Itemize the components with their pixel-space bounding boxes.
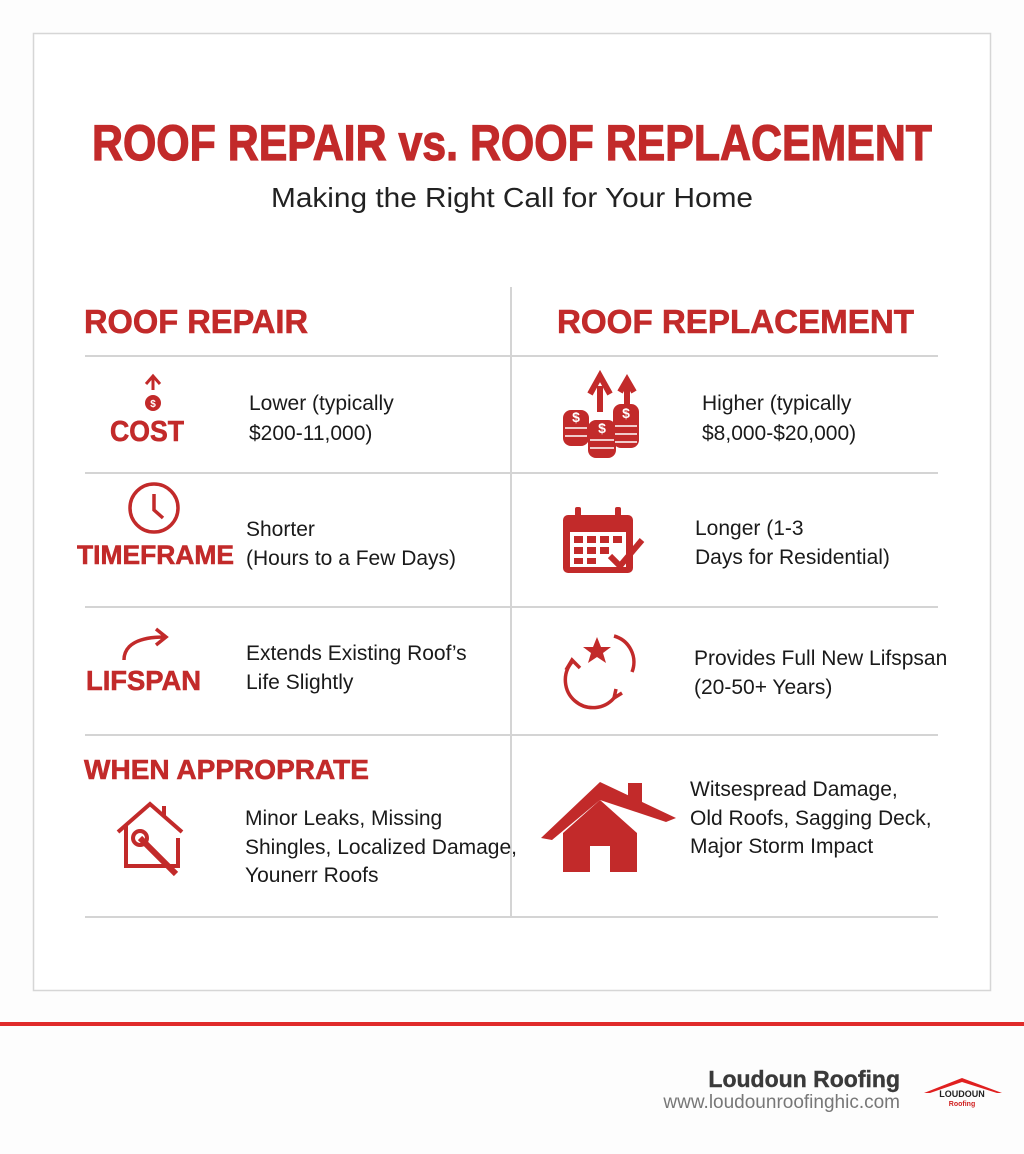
text: replacement timeframe: Days for Residential) [695, 546, 890, 569]
icon: stacked coins [563, 376, 639, 458]
text: replacement lifespan: (20-50+ Years) [694, 676, 832, 699]
text: repair cost: $200-11,000) [249, 422, 372, 445]
footer brand [662, 1066, 900, 1113]
text: repair timeframe: Shorter [246, 518, 315, 541]
footer brand: www.loudounroofinghic.com [662, 1092, 900, 1113]
label: timeframe: TIMEFRAME [77, 540, 234, 570]
label: lifspan: LIFSPAN [86, 665, 201, 696]
icon: house [541, 782, 676, 872]
text: replacement when: Major Storm Impact [690, 835, 873, 858]
icon: stacked coins: $ [572, 409, 580, 425]
text: repair cost: Lower (typically [249, 392, 394, 415]
text: repair timeframe: (Hours to a Few Days) [246, 547, 456, 570]
subtitle: Making the Right Call for Your Home [271, 182, 753, 213]
divider: red footer line [0, 1022, 1024, 1026]
text: replacement cost: Higher (typically [702, 392, 851, 415]
icon: logo: LOUDOUN [939, 1089, 985, 1099]
text: replacement when: Old Roofs, Sagging Deck, [690, 807, 932, 830]
icon: clock [130, 484, 178, 532]
text: replacement lifespan: Provides Full New Lifspsan [694, 647, 947, 670]
icon: house wrench [118, 804, 182, 874]
panel: main card [34, 34, 990, 990]
icon: logo: Roofing [949, 1101, 975, 1108]
heading: when appropriate: WHEN APPROPRATE [84, 754, 369, 785]
icon: calendar [563, 507, 642, 573]
text: repair when: Shingles, Localized Damage, [245, 836, 517, 859]
text: replacement when: Witsespread Damage, [690, 778, 898, 801]
text: replacement timeframe: Longer (1-3 [695, 517, 804, 540]
heading: roof replacement: ROOF REPLACEMENT [557, 303, 914, 340]
icon: cost: $ [150, 399, 156, 410]
icon: cost [110, 376, 184, 448]
text: repair when: Minor Leaks, Missing [245, 807, 442, 830]
text: repair when: Younerr Roofs [245, 864, 378, 887]
text: replacement cost: $8,000-$20,000) [702, 422, 856, 445]
icon: stacked coins: $ [622, 405, 630, 421]
text: repair lifespan: Extends Existing Roof’s [246, 642, 467, 665]
icon: stacked coins: $ [598, 420, 606, 436]
icon: cycle star [565, 636, 634, 708]
footer brand: Loudoun Roofing [708, 1066, 900, 1092]
icon: logo [924, 1078, 1002, 1108]
icon: cost: COST [110, 416, 184, 448]
heading: roof repair: ROOF REPAIR [84, 303, 308, 340]
text: repair lifespan: Life Slightly [246, 671, 354, 694]
icon: arrow lifespan [124, 629, 166, 660]
